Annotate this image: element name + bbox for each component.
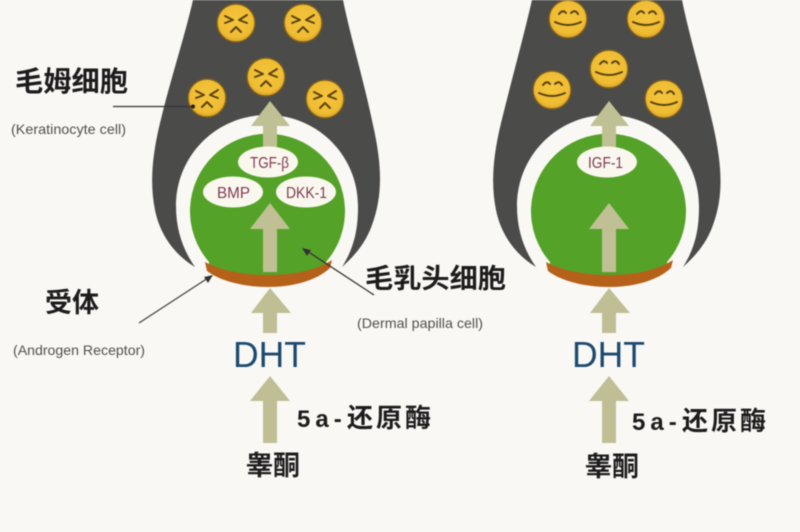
pathway: left bbox=[233, 288, 434, 481]
leader arrow: dermal papilla bbox=[302, 248, 374, 295]
smile 1 bbox=[549, 0, 587, 38]
keratinocyte faces left bbox=[188, 4, 344, 118]
leader arrow: receptor bbox=[139, 275, 213, 323]
label: dermal papilla cell bbox=[357, 264, 506, 331]
face 5 bbox=[306, 80, 344, 118]
smile 3 bbox=[590, 50, 628, 88]
arrow: DHT to receptor bbox=[251, 288, 291, 333]
label: dermal papilla cell: (Dermal papilla cell) bbox=[357, 315, 483, 331]
signal: TGF-β: TGF-β bbox=[250, 155, 289, 172]
smile 5 bbox=[645, 80, 683, 118]
enzyme label: 5a- bbox=[297, 406, 347, 433]
label: keratinocyte: 毛姆细胞 bbox=[15, 66, 128, 97]
smile 2 bbox=[627, 0, 665, 38]
label: keratinocyte: (Keratinocyte cell) bbox=[11, 121, 126, 137]
arrow: inside papilla right bbox=[589, 203, 629, 272]
signal: BMP bbox=[203, 176, 263, 208]
follicle sheath right bbox=[493, 0, 721, 267]
arrow: papilla to keratinocytes right bbox=[590, 101, 629, 150]
receptor band right bbox=[546, 260, 673, 287]
arrow: papilla to keratinocytes left bbox=[251, 101, 290, 150]
signal: IGF-1 bbox=[577, 146, 637, 178]
face 3 bbox=[247, 58, 285, 96]
signal: DKK-1 bbox=[276, 176, 336, 208]
label: receptor bbox=[13, 288, 145, 358]
enzyme label: 还原酶 bbox=[682, 406, 769, 436]
signal: TGF-β bbox=[238, 146, 298, 178]
smile 4 bbox=[533, 71, 571, 109]
face 1 bbox=[217, 4, 255, 42]
signal: BMP: BMP bbox=[217, 185, 250, 202]
arrow: testosterone to DHT bbox=[589, 376, 629, 443]
dermal papilla right bbox=[531, 134, 686, 279]
DHT label: DHT bbox=[572, 334, 645, 375]
receptor band left bbox=[205, 260, 332, 287]
arrow: inside papilla left bbox=[250, 203, 290, 272]
enzyme label: 还原酶 bbox=[347, 403, 434, 433]
label: receptor: 受体 bbox=[45, 288, 99, 318]
panel: right follicle, normal bbox=[493, 0, 721, 287]
testosterone label: 睾酮 bbox=[246, 451, 300, 481]
face 4 bbox=[188, 79, 226, 117]
testosterone label: 睾酮 bbox=[585, 452, 639, 482]
enzyme label: 5a- bbox=[632, 409, 682, 436]
label: dermal papilla cell: 毛乳头细胞 bbox=[365, 264, 506, 294]
face 2 bbox=[284, 4, 322, 42]
label: receptor: (Androgen Receptor) bbox=[13, 342, 145, 358]
leader line: keratinocyte bbox=[113, 104, 195, 108]
arrow: testosterone to DHT bbox=[250, 376, 290, 443]
signal: DKK-1: DKK-1 bbox=[286, 185, 327, 202]
arrow: DHT to receptor bbox=[590, 288, 630, 333]
keratinocyte faces right bbox=[533, 0, 683, 118]
follicle sheath left bbox=[152, 0, 380, 267]
panel: left follicle, affected by DHT bbox=[152, 0, 380, 287]
label: keratinocyte bbox=[11, 66, 128, 137]
pathway: right bbox=[572, 288, 769, 482]
dermal papilla left bbox=[190, 134, 345, 279]
signal: IGF-1: IGF-1 bbox=[588, 155, 623, 172]
DHT label: DHT bbox=[233, 334, 306, 375]
